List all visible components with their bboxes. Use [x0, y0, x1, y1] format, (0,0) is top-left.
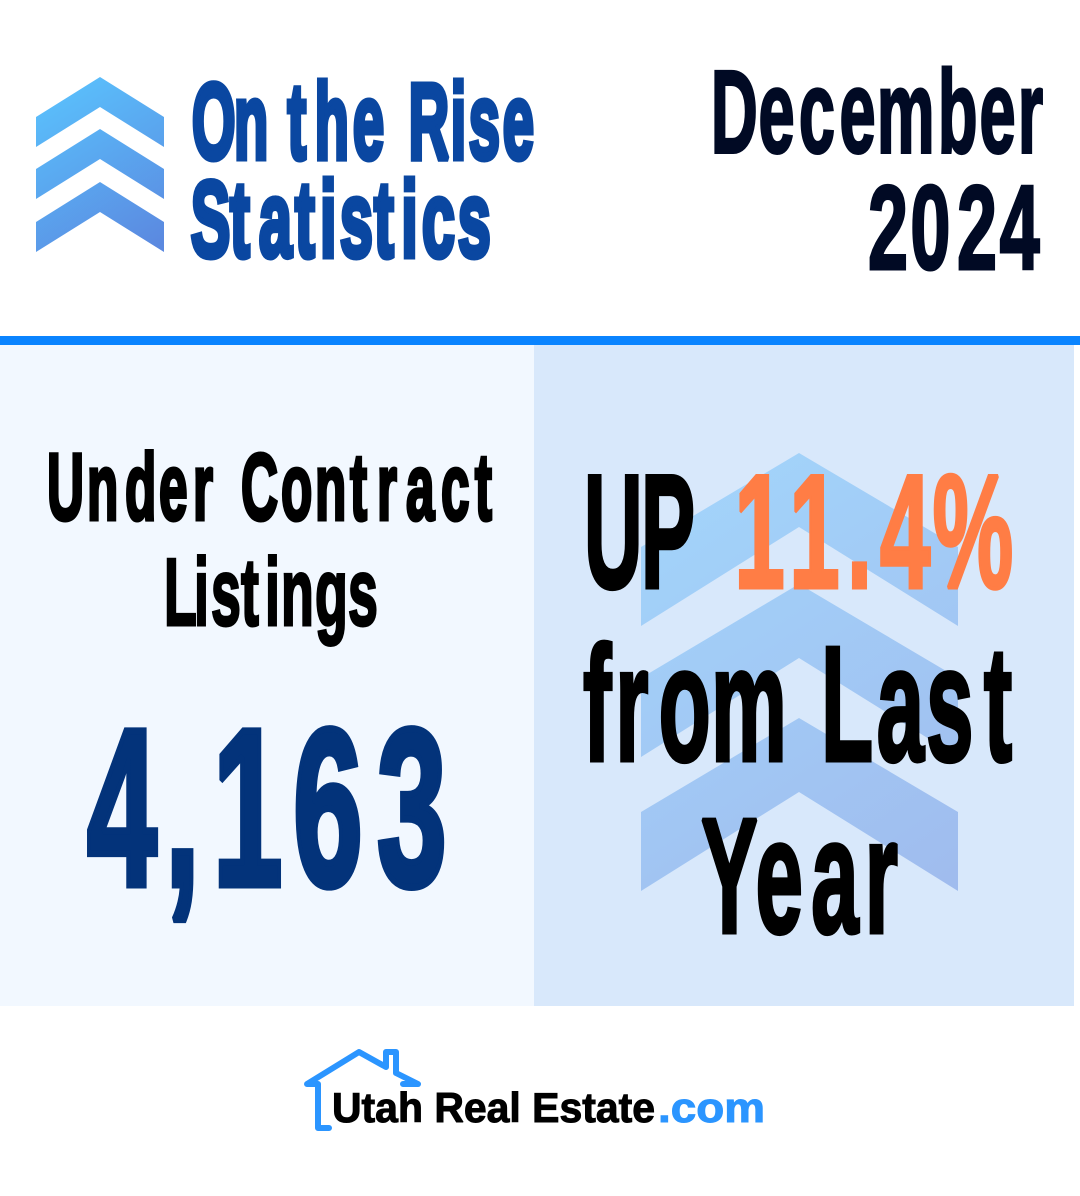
- title: [191, 62, 534, 280]
- panel: listings count: [0, 345, 534, 1006]
- icon: rising chevrons: [36, 77, 164, 252]
- listings label: Under Contract: [47, 435, 492, 541]
- date heading: December: [711, 47, 1043, 179]
- header background: [0, 0, 1080, 336]
- title: On the Rise: [192, 62, 534, 182]
- change text: [583, 441, 1013, 968]
- title: Statistics: [191, 160, 491, 280]
- icon: large background chevrons: [641, 453, 958, 891]
- listings label: [47, 435, 492, 646]
- listings label: Listings: [164, 540, 378, 646]
- logo: Utah Real Estate.com: [307, 1052, 765, 1131]
- panel: year over year change: [534, 345, 1074, 1006]
- listings number: 4,163: [87, 684, 447, 933]
- icon: house outline: [307, 1052, 418, 1128]
- date heading: [711, 47, 1043, 294]
- date heading: 2024: [868, 160, 1040, 294]
- change text: from Last: [583, 612, 1012, 796]
- logo wordmark: Utah Real Estate: [332, 1084, 655, 1131]
- blue divider: [0, 336, 1080, 345]
- change text: Year: [701, 784, 898, 968]
- change text: UP: [584, 442, 695, 623]
- change text: 11.4%: [734, 441, 1013, 622]
- logo domain: .com: [658, 1084, 765, 1131]
